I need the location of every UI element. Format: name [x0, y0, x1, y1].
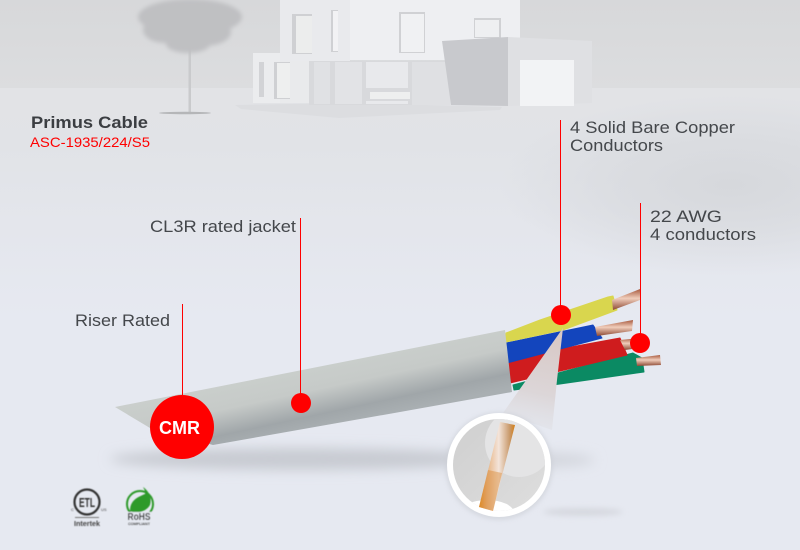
- icon: RoHS compliant mark: RoHS: [128, 511, 150, 523]
- icon: ETL Intertek mark: Intertek: [74, 521, 100, 528]
- callout: Riser Rated: [75, 304, 214, 459]
- cable: green wire: [513, 353, 644, 390]
- cable: copper tips: [595, 289, 661, 366]
- cable: grey jacket: [115, 330, 512, 445]
- callout: copper conductors: 4 Solid Bare Copper: [570, 118, 735, 137]
- callout: CL3R rated jacket: [150, 217, 311, 413]
- product name: Primus Cable: [31, 113, 148, 132]
- callout: 22 AWG: [630, 203, 756, 353]
- floor shadows: [110, 448, 623, 516]
- icon: ETL Intertek mark: ETL: [79, 495, 95, 510]
- callout: 22 AWG: 22 AWG: [650, 207, 722, 226]
- icon: ETL Intertek mark: C: [71, 507, 74, 512]
- icon: ETL Intertek mark: US: [101, 507, 107, 512]
- callout: Riser Rated: CMR: [159, 418, 200, 438]
- cable: blue wire: [506, 325, 602, 363]
- icon: ETL Intertek mark: [71, 490, 107, 528]
- illustration: tree: [138, 0, 242, 114]
- brand heading: [30, 113, 150, 150]
- magnifier: cone: [503, 328, 563, 430]
- callout: copper conductors: Conductors: [570, 136, 663, 155]
- magnifier: copper conductor detail: [445, 409, 553, 526]
- icon: RoHS compliant mark: COMPLIANT: [128, 522, 151, 526]
- illustration: house: [235, 0, 592, 118]
- callout: CL3R rated jacket: CL3R rated jacket: [150, 217, 296, 236]
- callout: Riser Rated: Riser Rated: [75, 311, 170, 330]
- model number: ASC-1935/224/S5: [30, 134, 150, 150]
- cable: red wire: [508, 338, 627, 383]
- cable: [115, 289, 661, 445]
- callout: 22 AWG: 4 conductors: [650, 225, 756, 244]
- cable: yellow wire: [506, 296, 617, 342]
- icon: RoHS compliant mark: [125, 487, 155, 526]
- callout: copper conductors: [551, 118, 735, 325]
